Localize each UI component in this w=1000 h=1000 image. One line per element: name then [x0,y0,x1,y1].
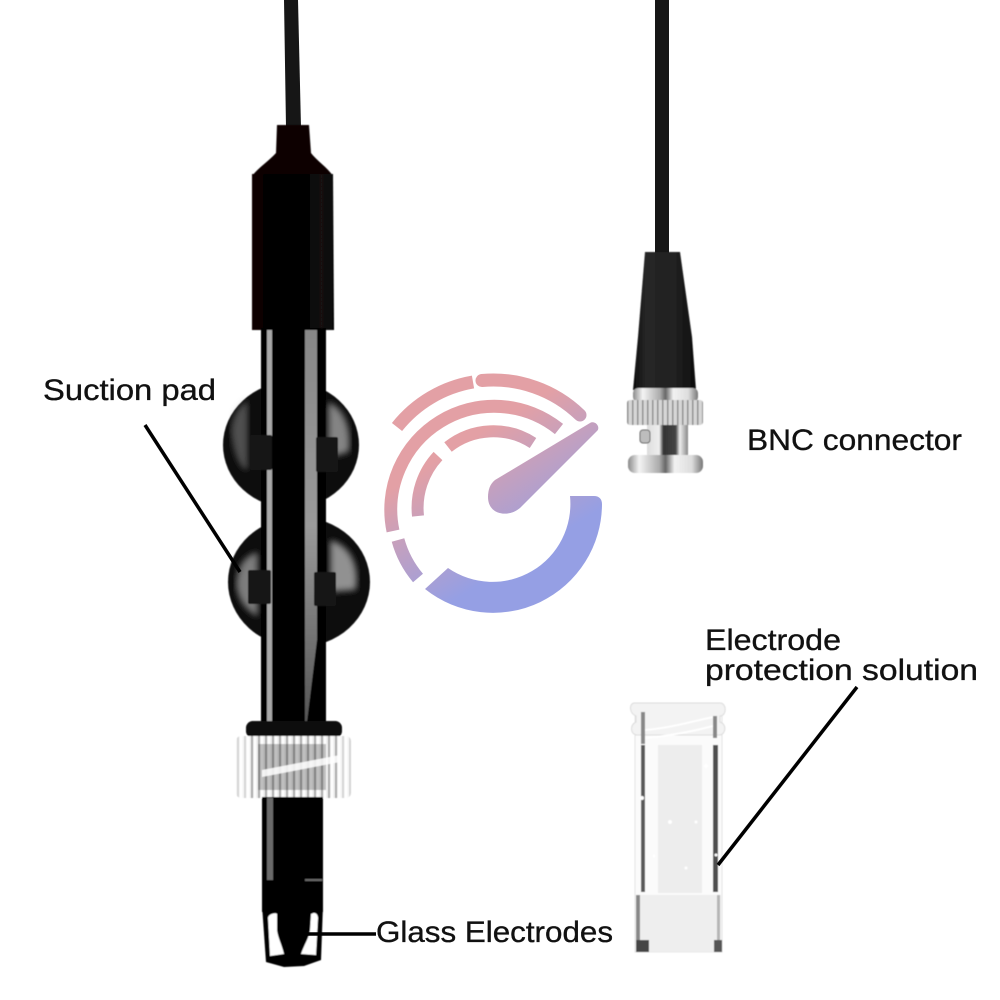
vial rim [630,703,725,735]
suction pad lower [228,517,370,647]
leader line: suction pad [145,425,240,572]
tip guard [262,905,323,967]
strain relief [252,125,333,176]
connector knurled ring [627,400,703,425]
label: glass electrodes: Glass Electrodes [376,916,613,949]
vial right edge [713,745,718,892]
label: electrode protection solution: Electrode [705,624,841,657]
vial body [635,714,722,952]
connector bayonet pin [640,430,650,443]
vial base shadows [636,895,640,940]
probe cable [284,0,301,128]
logo watermark [391,380,602,613]
logo inner ring right [448,431,533,447]
main tube [261,328,326,723]
suction pad upper [223,382,359,508]
label: suction pad: Suction pad [43,374,216,407]
connector boot [633,252,696,390]
clips [248,435,338,606]
logo outer ring right [482,380,580,415]
logo inner ring left [418,456,438,516]
label: electrode protection solution [705,624,978,687]
vial base liquid [636,895,721,952]
vial solution highlight [658,745,702,893]
electrode probe [223,125,370,967]
lower tube [262,797,323,912]
connector base [628,455,703,473]
logo lower ring segment [398,540,418,578]
clear collar [236,736,351,798]
label: BNC connector: BNC connector [747,424,962,457]
upper sleeve [252,174,334,330]
leader line: protection solution [718,687,857,865]
collar flange [246,721,342,738]
leader line: glass electrodes [298,932,376,936]
connector ferrule [633,388,698,402]
logo outer ring left [397,382,473,427]
vial threads [645,717,713,738]
BNC cable [655,0,669,254]
label: electrode protection solution: protection solution [705,654,978,687]
BNC connector [627,252,703,473]
vial left edge [641,745,645,892]
logo needle [488,422,598,514]
connector neck [647,425,688,457]
protection solution vial [630,703,725,952]
vial bubbles [640,764,718,870]
logo speed arc [425,496,602,613]
logo middle ring [391,406,559,531]
